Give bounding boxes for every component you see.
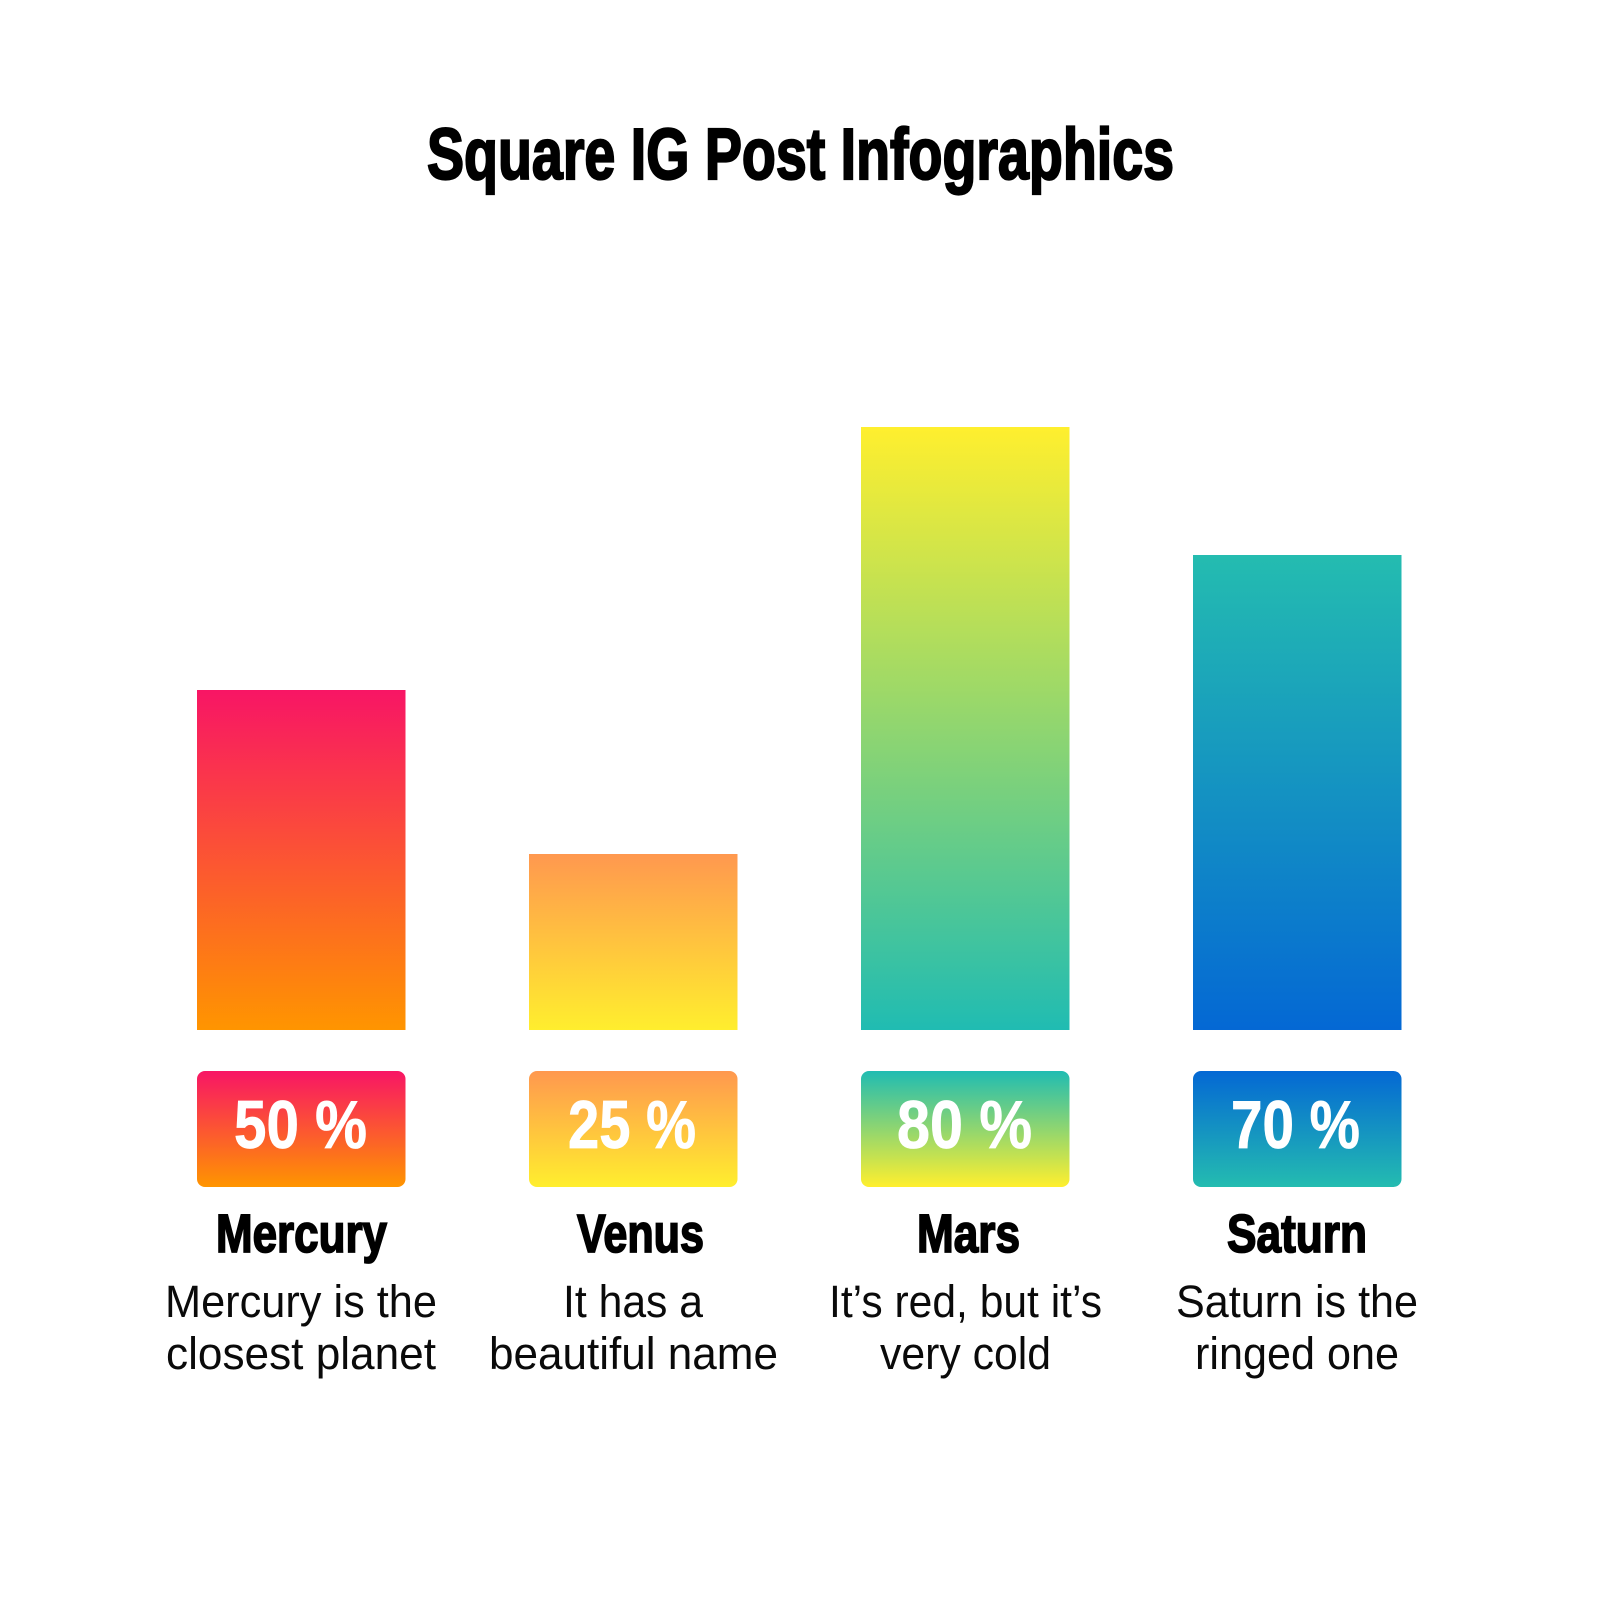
bar: Saturn 70%	[1193, 555, 1402, 1030]
badge: Mercury 50%	[197, 1071, 406, 1187]
description: Venus: beautiful name	[489, 1328, 778, 1379]
description: Saturn	[1176, 1276, 1418, 1379]
description: Venus: It has a	[563, 1276, 704, 1327]
description: Mercury: Mercury is the	[165, 1276, 437, 1327]
description: Saturn: Saturn is the	[1176, 1276, 1418, 1327]
badge: Mars 80%	[861, 1071, 1070, 1187]
badge: Venus 25%	[529, 1071, 738, 1187]
description: Mars	[829, 1276, 1102, 1379]
bar: Venus 25%	[529, 854, 738, 1030]
value: Mars: 80 %	[897, 1087, 1032, 1163]
bar: Mercury 50%	[197, 690, 406, 1030]
badge: Saturn 70%	[1193, 1071, 1402, 1187]
panel: Mars	[829, 427, 1102, 1379]
description: Mercury: closest planet	[166, 1328, 436, 1379]
description: Mars: It’s red, but it’s	[829, 1276, 1102, 1327]
name: Venus: Venus	[577, 1204, 704, 1264]
description: Mercury	[165, 1276, 437, 1379]
value: Mercury: 50 %	[234, 1087, 367, 1163]
name: Mars: Mars	[917, 1204, 1020, 1264]
description: Venus	[489, 1276, 778, 1379]
name: Mercury: Mercury	[216, 1204, 387, 1264]
description: Saturn: ringed one	[1195, 1328, 1399, 1379]
name: Saturn: Saturn	[1227, 1204, 1367, 1264]
title: Square IG Post Infographics	[427, 115, 1174, 195]
value: Saturn: 70 %	[1231, 1087, 1360, 1163]
panel: Saturn	[1176, 555, 1418, 1379]
description: Mars: very cold	[880, 1328, 1051, 1379]
panel: Venus	[489, 854, 778, 1379]
bar: Mars 80%	[861, 427, 1070, 1030]
value: Venus: 25 %	[568, 1087, 696, 1163]
panel: Mercury	[165, 690, 437, 1379]
